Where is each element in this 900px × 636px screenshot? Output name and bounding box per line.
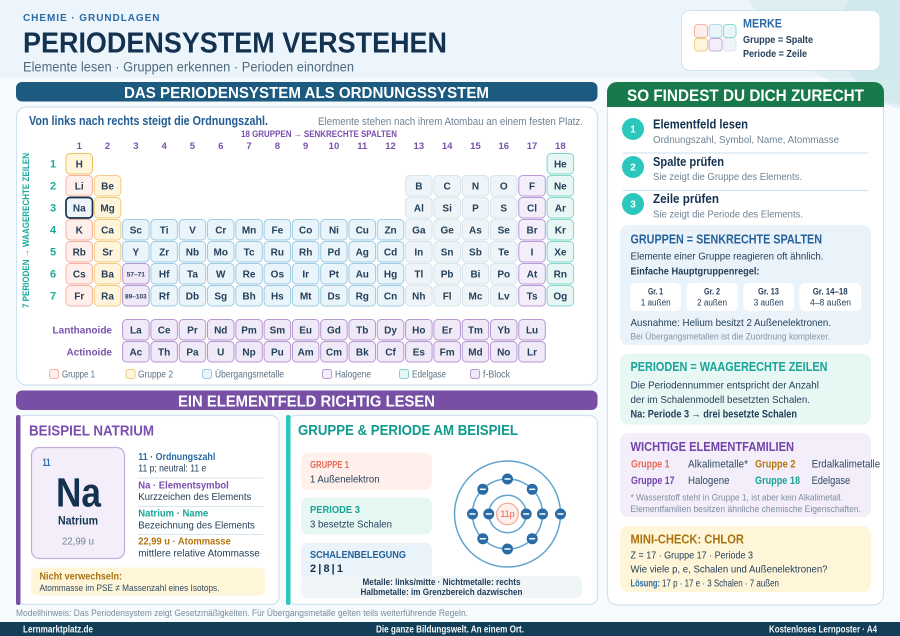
box: Elementfamilien: Gruppe 18 (755, 475, 800, 487)
period 5: Nb (186, 248, 199, 258)
period 7: 89–103 (125, 294, 147, 300)
group numbers: 7 (246, 141, 252, 152)
period 4: Zn (384, 226, 397, 236)
table lead text: Von links nach rechts steigt die Ordnungszahl. (29, 113, 268, 128)
nucleus: 11p (500, 509, 515, 519)
period 6: Hg (384, 270, 397, 280)
group numbers (77, 141, 566, 152)
explanation list: Na · Elementsymbol (138, 480, 229, 492)
actinoid row: Am (298, 348, 314, 358)
period 5: Rh (299, 248, 312, 258)
callout: Merke: MERKE (743, 16, 782, 30)
lanthanoid row: Nd (214, 326, 227, 336)
actinoid row: Es (413, 348, 425, 358)
box: Gruppen: Einfache Hauptgruppenregel: (630, 266, 760, 278)
period 7: Og (553, 292, 567, 302)
period numbers: 7 (50, 290, 56, 302)
card: Schalenbelegung: 2 | 8 | 1 (310, 563, 343, 575)
group numbers: 17 (527, 141, 537, 152)
box: Elementfamilien (620, 433, 880, 517)
actinoid row: Cf (385, 348, 396, 358)
panel: Gruppe und Periode am Beispiel (286, 415, 598, 605)
period 4: Br (526, 226, 538, 236)
chips: outer electrons: 4–8 außen (810, 298, 851, 309)
box: Mini-Check (620, 526, 871, 592)
period 2: N (472, 182, 479, 192)
period 6: Rn (554, 270, 567, 280)
period 5: Tc (244, 248, 255, 258)
actinoid row: Fm (440, 348, 455, 358)
chips: outer electrons: 3 außen (754, 298, 784, 309)
group numbers: 18 (555, 141, 566, 152)
actinoid row: Cm (326, 348, 342, 358)
group numbers: 11 (357, 141, 368, 152)
period 4: Ti (160, 226, 169, 236)
period numbers: 4 (50, 224, 57, 236)
chips: outer electrons: Gr. 14–18 (813, 286, 848, 298)
period 4: Ni (329, 226, 339, 236)
lanthanoid row: Lu (526, 326, 538, 336)
period 4: Mn (242, 226, 256, 236)
lanthanoid row: Gd (327, 326, 341, 336)
period 7: Hs (271, 292, 284, 302)
step 2: 2 (630, 162, 636, 174)
period 4: Se (498, 226, 510, 236)
explanation list: 11 p; neutral: 11 e (138, 463, 206, 475)
actinoid row: Lr (527, 348, 537, 358)
lanthanoid row: Ce (158, 326, 171, 336)
callout: Nicht verwechseln: Atommasse im PSE ≠ Massenzahl eines Isotops. (40, 583, 220, 594)
period 4 (66, 220, 574, 240)
period 5: Xe (554, 248, 567, 258)
group numbers: 12 (385, 141, 396, 152)
legend: Gruppe 2 (138, 370, 173, 380)
banner: Das Periodensystem als Ordnungssystem: DAS PERIODENSYSTEM ALS ORDNUNGSSYSTEM (124, 85, 489, 102)
period 5: I (531, 248, 534, 258)
period 2: Ne (554, 182, 567, 192)
title: PERIODENSYSTEM VERSTEHEN (23, 28, 447, 60)
actinoid row: Bk (356, 348, 369, 358)
period 2: O (500, 182, 508, 192)
period 3: Cl (527, 204, 537, 214)
step 2: Spalte prüfen (653, 155, 724, 169)
period 5: Cd (384, 248, 397, 258)
chips: outer electrons: 2 außen (697, 298, 727, 309)
step 1 (622, 118, 839, 146)
electrons (467, 474, 566, 554)
period 5 (66, 242, 574, 262)
period 7: Db (186, 292, 199, 302)
box: Elementfamilien: Alkalimetalle* (688, 458, 749, 470)
lanthanoid row: La (130, 326, 142, 336)
lanthanoid row: Pr (187, 326, 198, 336)
box: Mini-Check: 17 p · 17 e · 3 Schalen · 7 außen (662, 578, 779, 590)
period 2: Be (101, 182, 114, 192)
period 4: As (469, 226, 482, 236)
lanthanoid row: Ho (412, 326, 426, 336)
callout: Merke (682, 10, 880, 70)
legend: f-Block (483, 370, 511, 380)
actinoid row: U (217, 348, 224, 358)
period 6: Re (243, 270, 256, 280)
lanthanoid row: Er (442, 326, 453, 336)
icon: mini periodic table (694, 24, 736, 51)
period 5: Mo (214, 248, 228, 258)
period 7: Sg (214, 292, 227, 302)
actinoid row: Th (158, 348, 170, 358)
box: Mini-Check: MINI-CHECK: CHLOR (630, 532, 744, 546)
explanation list (138, 451, 263, 560)
period 7: Mt (300, 292, 312, 302)
card: Schalenbelegung: SCHALENBELEGUNG (310, 549, 406, 561)
box: Mini-Check: Z = 17 · Gruppe 17 · Periode 3 (630, 550, 753, 562)
box: Mini-Check: Lösung: (630, 578, 660, 590)
footer: Lernmarktplatz.de (23, 624, 93, 636)
period 3: Al (414, 204, 424, 214)
callout: Nicht verwechseln (31, 568, 265, 596)
period 4: Kr (555, 226, 566, 236)
footer: Die ganze Bildungswelt. An einem Ort. (376, 624, 524, 636)
period 6: Os (271, 270, 284, 280)
lanthanoid row: Sm (270, 326, 285, 336)
period 7: Nh (412, 292, 426, 302)
box: Perioden (620, 354, 871, 424)
period 1: He (554, 160, 567, 170)
axis label: periods: 7 PERIODEN → WAAGERECHTE ZEILEN (21, 153, 32, 308)
panel: So findest du dich zurecht (607, 82, 884, 605)
step 3: 3 (630, 200, 636, 210)
period 6: Ba (101, 270, 114, 280)
period 7: Rf (159, 292, 170, 302)
period 7: Cn (384, 292, 397, 302)
group numbers: 16 (498, 141, 509, 152)
period 2: B (415, 182, 422, 192)
period 4: V (189, 226, 196, 236)
step 3 (622, 192, 803, 220)
diagram: Bohr model of sodium (454, 461, 566, 567)
chips: outer electrons: 1 außen (641, 298, 671, 309)
period 2: Li (75, 182, 84, 192)
explanation list: 11 · Ordnungszahl (138, 451, 215, 463)
period 7: Mc (468, 292, 483, 302)
banner: Ein Elementfeld richtig lesen (16, 390, 598, 410)
period numbers: 2 (50, 180, 56, 192)
period 6: Bi (470, 270, 481, 280)
box: Elementfamilien: Erdalkalimetalle (812, 458, 880, 470)
group numbers: 5 (190, 141, 196, 152)
box: Gruppen (620, 225, 871, 345)
period 4: K (76, 226, 84, 236)
period 6: Ir (302, 270, 309, 280)
period 4: Ge (440, 226, 454, 236)
element tile: sodium: Natrium (58, 515, 98, 527)
header: title block (23, 13, 447, 74)
period 3: Na (73, 204, 86, 214)
box: Perioden: PERIODEN = WAAGERECHTE ZEILEN (630, 360, 828, 374)
group numbers: 4 (162, 141, 168, 152)
group numbers: 15 (470, 141, 481, 152)
period 7: Rg (356, 292, 369, 302)
period 5: Sr (102, 248, 113, 258)
legend: Gruppe 1 (62, 370, 95, 380)
lanthanoid row: Lanthanoide (53, 326, 112, 336)
box: Elementfamilien: Edelgase (812, 475, 850, 487)
period 5: Ag (356, 248, 369, 258)
chips: outer electrons (630, 283, 861, 311)
group numbers: 6 (218, 141, 223, 152)
period 6: Pt (329, 270, 340, 280)
lanthanoid row: Eu (299, 326, 312, 336)
group numbers: 10 (329, 141, 339, 152)
period numbers: 3 (50, 202, 56, 214)
period 1 (66, 154, 574, 174)
panel header (607, 82, 884, 107)
box: Gruppen: Elemente einer Gruppe reagieren oft ähnlich. (630, 250, 824, 262)
group numbers: 8 (275, 141, 280, 152)
actinoid row: Pu (271, 348, 284, 358)
panel: periodic table (16, 107, 598, 385)
period 5: Rb (73, 248, 86, 258)
explanation list: Natrium · Name (138, 508, 208, 520)
step 1: Elementfeld lesen (653, 118, 748, 132)
card: Gruppe 1: GRUPPE 1 (310, 459, 349, 471)
box: Elementfamilien: WICHTIGE ELEMENTFAMILIEN (630, 440, 794, 454)
period 5: Sn (441, 248, 454, 258)
lanthanoid row: Yb (497, 326, 510, 336)
period 3: S (500, 204, 507, 214)
lanthanoid row (53, 320, 545, 340)
explanation list: Kurzzeichen des Elements (138, 491, 251, 503)
period 2: C (444, 182, 451, 192)
legend: Edelgase (412, 370, 446, 380)
panel header: SO FINDEST DU DICH ZURECHT (627, 86, 865, 105)
heading: GRUPPE & PERIODE AM BEISPIEL (298, 422, 518, 439)
group numbers: 13 (414, 141, 424, 152)
period numbers: 5 (50, 246, 56, 258)
callout: Merke: Gruppe = Spalte (743, 34, 813, 46)
footer (0, 622, 900, 636)
card: Periode 3: PERIODE 3 (310, 504, 360, 516)
period 6: Hf (159, 270, 170, 280)
period 3: Si (442, 204, 452, 214)
note: metals and non-metals (301, 576, 582, 598)
eyebrow: CHEMIE · GRUNDLAGEN (23, 13, 160, 24)
box: Gruppen: Bei Übergangsmetallen ist die Zuordnung komplexer. (630, 332, 830, 342)
period 6: W (216, 270, 226, 280)
period 7: Bh (242, 292, 256, 302)
actinoid row: Actinoide (66, 348, 112, 358)
legend (50, 368, 511, 380)
period 5: In (414, 248, 423, 258)
step 3: Zeile prüfen (653, 192, 719, 206)
period 3: Mg (100, 204, 115, 214)
period 7: Fr (74, 292, 84, 302)
group numbers: 9 (303, 141, 308, 152)
step 1: 1 (630, 124, 636, 136)
chips: outer electrons: Gr. 1 (648, 286, 664, 298)
period 4: Sc (130, 226, 142, 236)
lanthanoid row: Dy (384, 326, 397, 336)
period 4: Cu (356, 226, 369, 236)
box: Gruppen: GRUPPEN = SENKRECHTE SPALTEN (630, 232, 822, 246)
element tile: sodium: Na (56, 470, 102, 516)
period 2 (66, 176, 574, 196)
callout: Merke: Periode = Zeile (743, 48, 807, 60)
group numbers: 3 (133, 141, 138, 152)
step 2 (622, 155, 802, 183)
box: Gruppen: Ausnahme: Helium besitzt 2 Außenelektronen. (630, 317, 831, 329)
step 3: Sie zeigt die Periode des Elements. (653, 208, 803, 220)
element tile: sodium: 11 (42, 457, 50, 469)
period 7: Ds (328, 292, 341, 302)
group numbers: 14 (442, 141, 453, 152)
box: Elementfamilien: * Wasserstoff steht in Gruppe 1, ist aber kein Alkalimetall. (630, 492, 843, 504)
actinoid row: Np (242, 348, 256, 358)
lanthanoid row: Pm (241, 326, 257, 336)
box: Mini-Check: Wie viele p, e, Schalen und Außenelektronen? (630, 564, 828, 576)
box: Perioden: der im Schalenmodell besetzten Schalen. (630, 394, 810, 406)
note: metals and non-metals: Halbmetalle: im Grenzbereich dazwischen (360, 587, 523, 598)
chips: outer electrons: Gr. 2 (704, 286, 720, 298)
card: Gruppe 1: 1 Außenelektron (310, 473, 380, 485)
group numbers: 2 (105, 141, 110, 152)
lanthanoid row: Tb (356, 326, 368, 336)
period 5: Y (133, 248, 140, 258)
explanation list: mittlere relative Atommasse (138, 548, 260, 560)
card: Periode 3: 3 besetzte Schalen (310, 518, 392, 530)
chips: outer electrons: Gr. 13 (758, 286, 779, 298)
actinoid row: Pa (186, 348, 199, 358)
period 7: Ra (101, 292, 114, 302)
step 2: Sie zeigt die Gruppe des Elements. (653, 171, 802, 183)
callout: Nicht verwechseln: Nicht verwechseln: (40, 570, 122, 582)
period 6: Tl (414, 270, 424, 280)
card: Periode 3 (301, 498, 432, 534)
period 6: Ta (187, 270, 198, 280)
heading: BEISPIEL NATRIUM (29, 423, 154, 440)
period 5: Pd (328, 248, 340, 258)
actinoid row (66, 342, 545, 362)
box: Elementfamilien: Gruppe 17 (631, 475, 674, 487)
period 4: Ga (412, 226, 426, 236)
period 7 (66, 286, 574, 306)
card: Schalenbelegung (301, 543, 432, 580)
box: Perioden: Na: Periode 3 → drei besetzte Schalen (630, 408, 797, 420)
period 4: Fe (272, 226, 284, 236)
period numbers: 1 (50, 158, 56, 170)
period 7: Lv (498, 292, 510, 302)
box: Elementfamilien: Gruppe 2 (755, 458, 796, 470)
explanation list: 22,99 u · Atommasse (138, 536, 231, 548)
group numbers: 1 (77, 141, 83, 152)
period 5: Zr (159, 248, 169, 258)
period 6: Pb (441, 270, 454, 280)
box: Elementfamilien: Halogene (688, 475, 730, 487)
element tile: sodium (32, 448, 124, 558)
period 3: Ar (555, 204, 566, 214)
period 5: Sb (469, 248, 482, 258)
period numbers: 6 (50, 268, 56, 280)
table side note: Elemente stehen nach ihrem Atombau an einem festen Platz. (318, 116, 583, 128)
period 4: Ca (101, 226, 114, 236)
lanthanoid row: Tm (468, 326, 483, 336)
period 4: Co (299, 226, 312, 236)
period 7: Ts (527, 292, 538, 302)
period 3 (66, 198, 574, 218)
period 7: Fl (443, 292, 452, 302)
period 6: 57–71 (127, 272, 145, 278)
box: Perioden: Die Periodennummer entspricht der Anzahl (630, 380, 819, 392)
period 6: At (527, 270, 538, 280)
period 6: Po (497, 270, 510, 280)
step 1: Ordnungszahl, Symbol, Name, Atommasse (653, 134, 839, 146)
legend: Halogene (335, 370, 371, 380)
period 6: Cs (73, 270, 86, 280)
period 1: H (76, 160, 83, 170)
box: Elementfamilien: Gruppe 1 (631, 458, 670, 470)
actinoid row: Md (468, 348, 483, 358)
period 2: F (529, 182, 535, 192)
note: metals and non-metals: Metalle: links/mitte · Nichtmetalle: rechts (362, 577, 520, 588)
banner: Das Periodensystem als Ordnungssystem (16, 82, 598, 102)
period numbers (50, 158, 57, 302)
period 4: Cr (215, 226, 226, 236)
panel: Beispiel Natrium (16, 415, 279, 605)
period 5: Te (498, 248, 510, 258)
explanation list: Bezeichnung des Elements (138, 519, 255, 531)
period 3: P (472, 204, 479, 214)
actinoid row: Ac (129, 348, 143, 358)
period 6 (66, 264, 574, 284)
note: model hint: Modellhinweis: Das Periodensystem zeigt Gesetzmäßigkeiten. Für Übergangsmetalle gelten teils weiterführende Regeln. (16, 608, 468, 619)
legend: Übergangsmetalle (215, 368, 284, 380)
axis label: groups: 18 GRUPPEN → SENKRECHTE SPALTEN (241, 129, 397, 140)
subtitle: Elemente lesen · Gruppen erkennen · Perioden einordnen (23, 60, 354, 74)
actinoid row: No (497, 348, 510, 358)
card: Gruppe 1 (301, 453, 432, 490)
period 6: Au (356, 270, 369, 280)
box: Elementfamilien: Elementfamilien besitzen ähnliche chemische Eigenschaften. (630, 504, 861, 515)
period 5: Ru (271, 248, 284, 258)
banner: Ein Elementfeld richtig lesen: EIN ELEMENTFELD RICHTIG LESEN (178, 394, 435, 410)
element tile: sodium: 22,99 u (62, 535, 94, 547)
